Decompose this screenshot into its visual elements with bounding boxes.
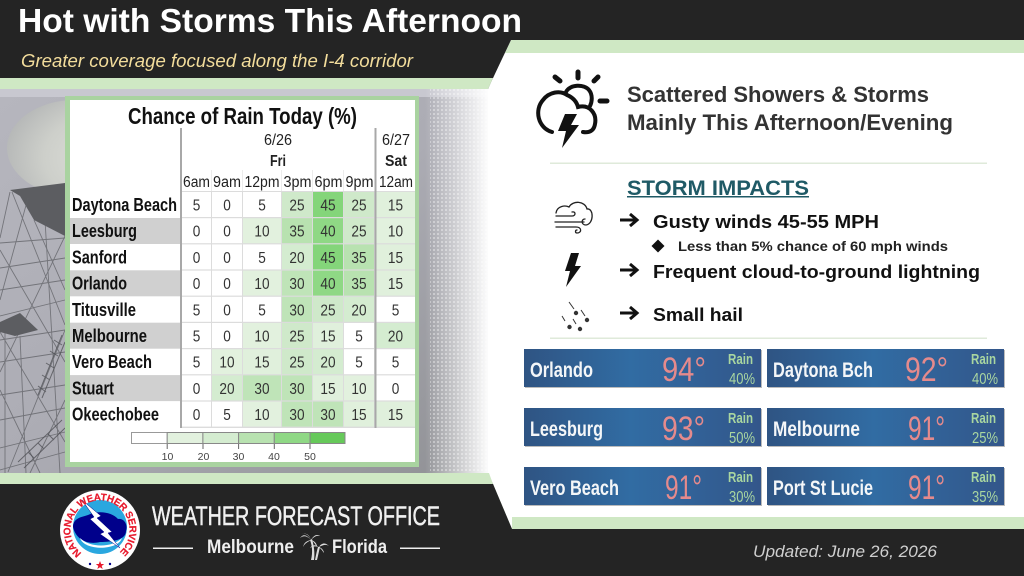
row: Leesburg: [182, 218, 415, 243]
row: Sanford: 5: [258, 250, 266, 267]
row: Stuart: 20: [219, 381, 235, 398]
list item: gusty winds: Gusty winds 45-55 MPH: [653, 211, 879, 232]
row: Vero Beach: 5: [355, 355, 363, 372]
city name column: Orlando: [72, 274, 127, 294]
column headers: 6/27: [382, 132, 410, 149]
panel: chance of rain table: [65, 96, 419, 467]
arrow: [620, 264, 637, 276]
office location: [153, 534, 440, 560]
row: Stuart: 15: [320, 381, 336, 398]
row: Titusville: 20: [351, 303, 367, 320]
card: Port St Lucie: 91°: [908, 469, 945, 507]
card: Orlando: 40%: [729, 371, 755, 388]
row: Vero Beach: [182, 349, 415, 374]
row: Titusville: 5: [258, 303, 266, 320]
row: Stuart: 30: [289, 381, 305, 398]
card: Daytona Beach: [767, 349, 1005, 389]
card: Daytona Beach: 40%: [972, 371, 998, 388]
row: Daytona Beach: 45: [320, 198, 336, 215]
row: Vero Beach: 5: [392, 355, 399, 372]
icon: thunderstorm cloud with sun: [538, 72, 607, 148]
subtitle: Greater coverage focused along the I-4 corridor: [21, 51, 414, 71]
row: Orlando: 30: [289, 276, 305, 293]
row: Orlando: 15: [388, 276, 403, 293]
row: Sanford: 35: [351, 250, 367, 267]
title banner: [0, 0, 1024, 89]
row: Vero Beach: 20: [320, 355, 336, 372]
row: Vero Beach: 25: [289, 355, 305, 372]
row: Stuart: [182, 375, 415, 400]
row: Sanford: 20: [289, 250, 305, 267]
city name column: Vero Beach: [72, 352, 152, 372]
row: Vero Beach: 10: [219, 355, 235, 372]
card: Orlando: Rain: [728, 352, 753, 368]
row: Leesburg: 40: [320, 224, 336, 241]
card: Melbourne: Rain: [971, 411, 996, 427]
table title: Chance of Rain Today (%): [128, 103, 357, 129]
row: Sanford: [182, 244, 415, 269]
list item: lightning: Frequent cloud-to-ground lightning: [653, 261, 980, 282]
updated date: Updated: June 26, 2026: [753, 542, 938, 561]
row: Stuart: 30: [254, 381, 270, 398]
row: Orlando: 35: [351, 276, 367, 293]
row: Melbourne: 5: [193, 329, 200, 346]
logo: National Weather Service: NATIONAL WEATHER SERVICE: [63, 493, 136, 558]
top green accent stripe: [505, 40, 1024, 53]
row: Orlando: 0: [223, 276, 231, 293]
card: Vero Beach: Vero Beach: [530, 477, 619, 500]
row: Titusville: 5: [392, 303, 399, 320]
icon: palm trees: [300, 534, 329, 560]
row: Melbourne: 0: [223, 329, 231, 346]
card: Port St Lucie: 35%: [972, 489, 998, 506]
color scale legend: 40: [268, 451, 280, 463]
row: Daytona Beach: 0: [223, 198, 231, 215]
color scale legend: [132, 432, 345, 463]
row: Titusville: 5: [193, 303, 200, 320]
row: Melbourne: 15: [320, 329, 336, 346]
card: Port St Lucie: Rain: [971, 470, 996, 486]
list item: sub-bullet wind chance: Less than 5% chance of 60 mph winds: [678, 238, 948, 254]
row: Stuart: 0: [193, 381, 200, 398]
column headers: 6/26: [264, 132, 292, 149]
row: Leesburg: 10: [388, 224, 403, 241]
card: Daytona Beach: 92°: [905, 351, 948, 389]
row: Leesburg: 35: [289, 224, 305, 241]
card: Port St Lucie: Port St Lucie: [773, 477, 873, 500]
heading: storm impacts: STORM IMPACTS: [627, 177, 809, 200]
color scale legend: 50: [304, 451, 316, 463]
city name column: Daytona Beach: [72, 195, 177, 215]
headline text: Mainly This Afternoon/Evening: [627, 110, 953, 135]
row: Sanford: 0: [193, 250, 200, 267]
row: Stuart: 0: [392, 381, 399, 398]
row: Daytona Beach: 15: [388, 198, 403, 215]
city name column: Okeechobee: [72, 405, 159, 425]
color scale legend: 30: [233, 451, 244, 463]
headline text: Scattered Showers & Storms: [627, 82, 929, 107]
row: Titusville: 30: [289, 303, 305, 320]
row: Sanford: 15: [388, 250, 403, 267]
column headers: [183, 132, 413, 191]
row: Vero Beach: 5: [193, 355, 200, 372]
color scale legend: 10: [162, 451, 173, 463]
row: Sanford: 0: [223, 250, 231, 267]
column headers: 9am: [213, 174, 241, 191]
row: Vero Beach: 15: [254, 355, 270, 372]
row: Okeechobee: 5: [223, 407, 231, 424]
card: Vero Beach: [524, 467, 762, 507]
row: Orlando: [182, 271, 415, 296]
row: Titusville: [182, 297, 415, 322]
row: Okeechobee: 15: [388, 407, 403, 424]
column headers: 6am: [183, 174, 210, 191]
card: Vero Beach: 30%: [729, 489, 755, 506]
row: Okeechobee: 30: [320, 407, 336, 424]
office location: Melbourne: [207, 537, 294, 558]
row: Melbourne: 5: [355, 329, 363, 346]
row: Leesburg: 10: [254, 224, 270, 241]
row: Stuart: 10: [351, 381, 367, 398]
icon: lightning bolt: [565, 253, 581, 287]
office location: Florida: [332, 537, 387, 558]
row: Daytona Beach: [182, 192, 415, 217]
row: Orlando: 0: [193, 276, 200, 293]
city name column: Leesburg: [72, 221, 137, 241]
icon: hail: [562, 302, 589, 331]
row: Orlando: 40: [320, 276, 336, 293]
office name: WEATHER FORECAST OFFICE: [152, 501, 440, 531]
card: Orlando: Orlando: [530, 359, 593, 382]
row: Okeechobee: [182, 402, 415, 427]
card: Leesburg: Leesburg: [530, 418, 603, 441]
card: Melbourne: 25%: [972, 430, 998, 447]
column headers: Fri: [270, 153, 286, 170]
color scale legend: 20: [198, 451, 209, 463]
row: Daytona Beach: 5: [193, 198, 200, 215]
city name column: Stuart: [72, 378, 114, 398]
row: Melbourne: 25: [289, 329, 305, 346]
row: Melbourne: 10: [254, 329, 270, 346]
card: Vero Beach: 91°: [665, 469, 702, 507]
city name column: Sanford: [72, 247, 127, 267]
row: Leesburg: 25: [351, 224, 367, 241]
card: Daytona Beach: Daytona Bch: [773, 359, 873, 382]
card: Vero Beach: Rain: [728, 470, 753, 486]
city name column: Melbourne: [72, 326, 147, 346]
card: Melbourne: 91°: [908, 410, 945, 448]
row: Okeechobee: 0: [193, 407, 200, 424]
row: Leesburg: 0: [193, 224, 200, 241]
row: Daytona Beach: 5: [258, 198, 266, 215]
card: Port St Lucie: [767, 467, 1005, 507]
column headers: 12am: [379, 174, 413, 191]
rain chance cells: [182, 191, 415, 428]
title: Hot with Storms This Afternoon: [18, 2, 522, 39]
row: Orlando: 10: [254, 276, 270, 293]
column headers: Sat: [385, 153, 407, 170]
column headers: 3pm: [284, 174, 312, 191]
card: Orlando: [524, 349, 762, 389]
row: Melbourne: 20: [388, 329, 403, 346]
footer band: [0, 473, 1024, 576]
row: Okeechobee: 30: [289, 407, 305, 424]
panel: radar tower photo background: [0, 89, 490, 473]
card: Leesburg: 93°: [662, 410, 705, 448]
column headers: 9pm: [346, 174, 374, 191]
card: Leesburg: Rain: [728, 411, 753, 427]
row: Daytona Beach: 25: [351, 198, 367, 215]
row: Daytona Beach: 25: [289, 198, 305, 215]
row: Titusville: 25: [320, 303, 336, 320]
row: Titusville: 0: [223, 303, 231, 320]
card: Melbourne: Melbourne: [773, 418, 860, 441]
arrow: [620, 307, 637, 319]
icon: wind cloud: [555, 202, 592, 233]
row: Okeechobee: 15: [351, 407, 367, 424]
row: Sanford: 45: [320, 250, 336, 267]
panel: white forecast area: [488, 40, 1024, 529]
headline text: [627, 82, 953, 135]
column headers: 12pm: [244, 174, 280, 191]
row: Melbourne: [182, 323, 415, 348]
card: Leesburg: 50%: [729, 430, 755, 447]
list item: small hail: Small hail: [653, 304, 743, 325]
card: Leesburg: [524, 408, 762, 448]
card: Melbourne: [767, 408, 1005, 448]
city name column: Titusville: [72, 300, 136, 320]
card: Orlando: 94°: [662, 351, 706, 389]
column headers: 6pm: [314, 174, 342, 191]
card: Daytona Beach: Rain: [971, 352, 996, 368]
row: Leesburg: 0: [223, 224, 231, 241]
row: Okeechobee: 10: [254, 407, 270, 424]
city name column: [70, 195, 180, 425]
arrow: [620, 214, 637, 226]
